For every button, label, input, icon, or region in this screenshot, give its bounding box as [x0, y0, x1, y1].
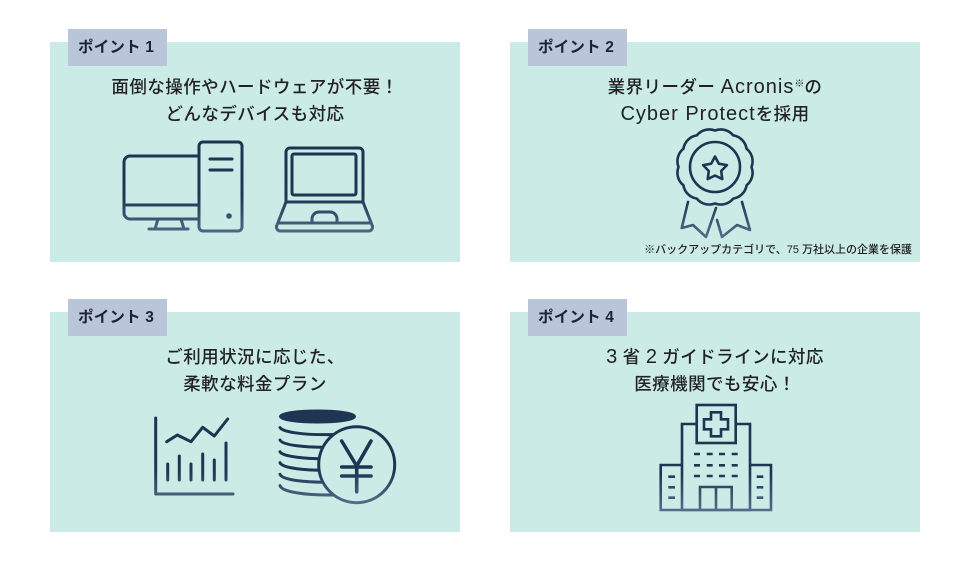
icon: line and bar chart — [156, 418, 233, 494]
icons: computers — [122, 140, 374, 232]
heading: point 1: 面倒な操作やハードウェアが不要！ — [111, 77, 399, 97]
panel background — [510, 42, 920, 262]
tag: point 1: ポイント 1 — [78, 39, 154, 56]
panel background — [50, 42, 460, 262]
panel: point 2 — [510, 29, 920, 262]
heading: point 3: ご利用状況に応じた、 — [165, 347, 345, 367]
heading: point 4 — [606, 346, 824, 394]
icon: yen coins — [280, 411, 395, 503]
heading: point 1: どんなデバイスも対応 — [166, 104, 344, 124]
heading: point 4: 3 省 2 ガイドラインに対応 — [606, 346, 824, 368]
icon: award medal — [676, 128, 754, 238]
icon: desktop computer — [124, 142, 242, 231]
heading: point 3 — [165, 347, 345, 394]
panel background — [510, 312, 920, 532]
icons: chart and coins — [154, 410, 396, 504]
tag: point 3: ポイント 3 — [78, 309, 154, 326]
tag: point 4: ポイント 4 — [538, 309, 614, 326]
footnote: ※バックアップカテゴリで、75 万社以上の企業を保護 — [644, 244, 912, 256]
heading: point 1 — [111, 77, 399, 124]
heading: point 4: 医療機関でも安心！ — [634, 374, 796, 394]
panel background — [50, 312, 460, 532]
panel: point 3 — [50, 299, 460, 532]
panel: point 4 — [510, 299, 920, 532]
tag: point 1 — [68, 29, 167, 66]
heading: point 3: 柔軟な料金プラン — [183, 374, 327, 394]
tag: point 3 — [68, 299, 167, 336]
tag: point 2: ポイント 2 — [538, 39, 614, 56]
tag: point 2 — [528, 29, 627, 66]
panel: point 1 — [50, 29, 460, 262]
heading: point 2 — [608, 76, 822, 125]
heading: point 2: Cyber Protectを採用 — [620, 103, 810, 125]
tag: point 4 — [528, 299, 627, 336]
icon: hospital — [659, 404, 772, 512]
icon: laptop — [276, 148, 373, 231]
heading: point 2: 業界リーダー Acronis※の — [608, 76, 822, 98]
